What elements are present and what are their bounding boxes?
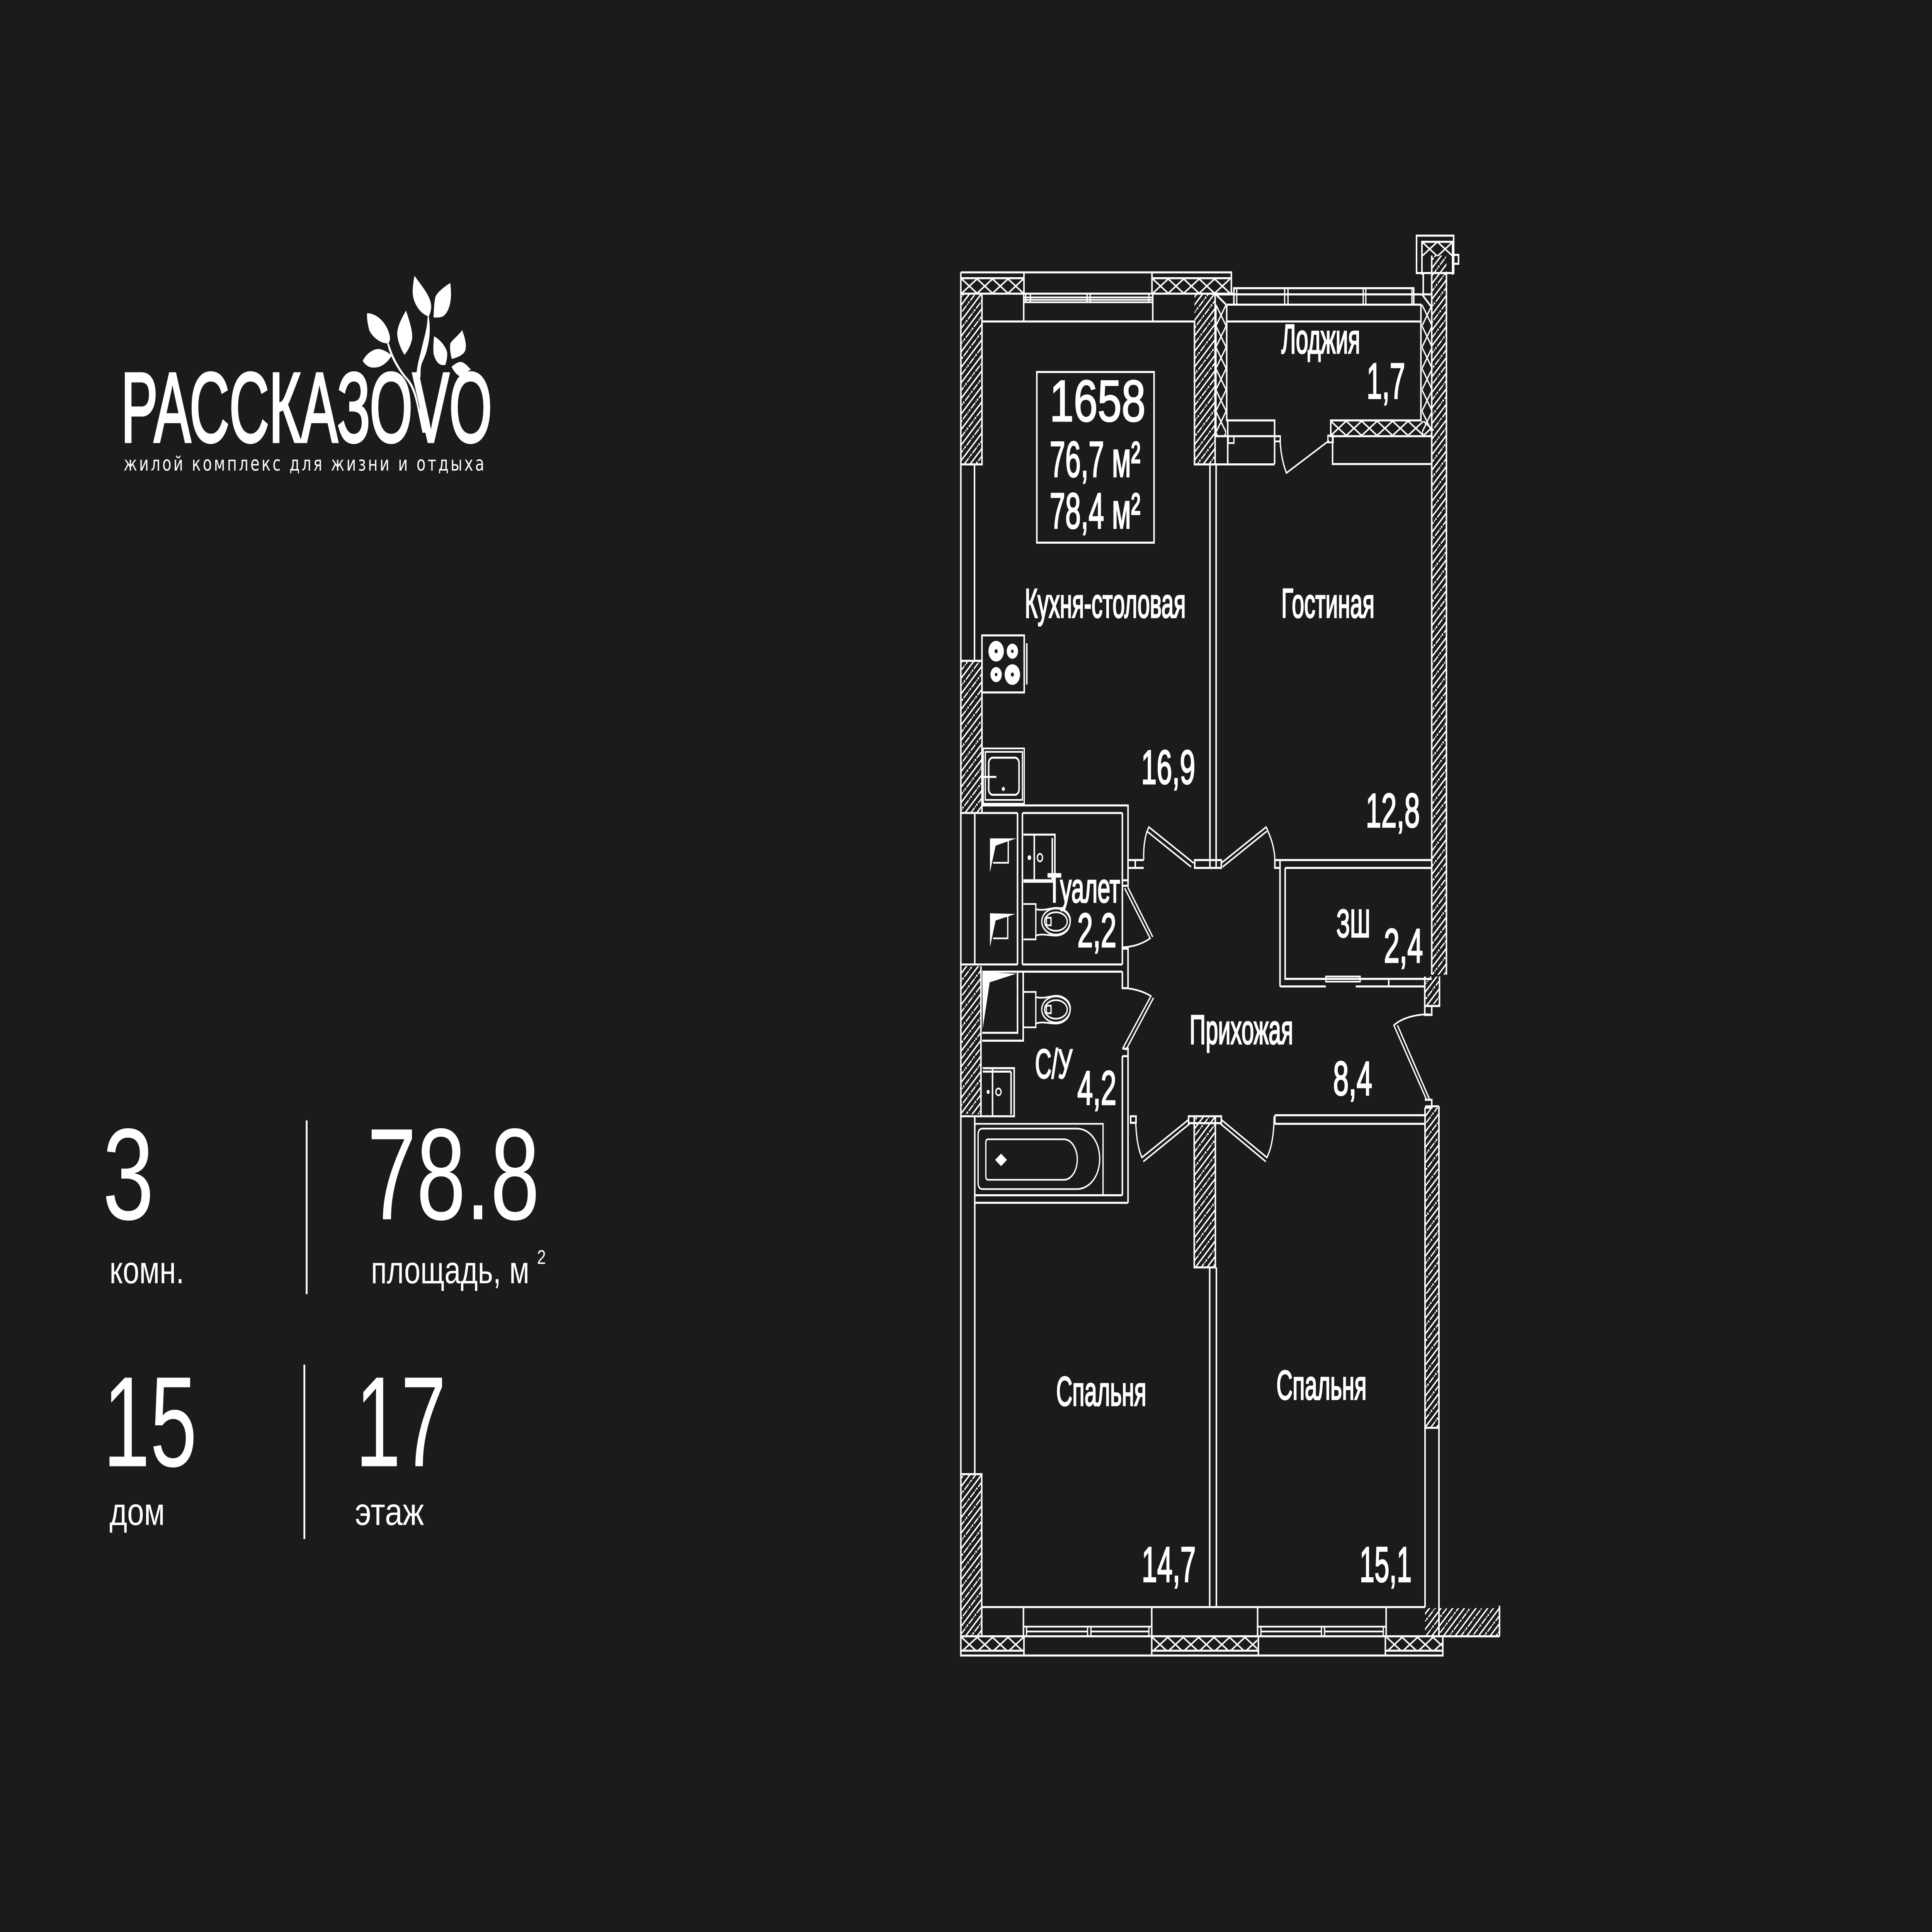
icon: bathtub	[975, 1124, 1103, 1195]
room labels: Кухня-столовая	[1025, 580, 1186, 626]
stat: area: 78.8	[367, 1102, 540, 1247]
apartment info box: 1658	[1050, 369, 1146, 434]
insulated wall bands	[962, 242, 1452, 1650]
icon: kitchen stove	[982, 635, 1027, 692]
room labels: С/У	[1035, 1041, 1073, 1087]
room labels: 2,4	[1384, 919, 1423, 973]
stat: rooms	[102, 1102, 184, 1291]
windows	[1024, 288, 1412, 1636]
logo wordmark: РАССКАЗОVО	[121, 352, 492, 463]
room labels	[1025, 316, 1423, 1593]
room labels: 12,8	[1366, 784, 1420, 838]
room labels: 4,2	[1077, 1061, 1116, 1115]
stat: floor	[355, 1350, 446, 1533]
apartment info box: 76,7 м²	[1050, 431, 1140, 488]
apartment info box: 78,4 м²	[1050, 483, 1140, 539]
icon: ventilation shafts	[982, 838, 1016, 1029]
wall outlines	[960, 236, 1500, 1655]
room labels: Гостиная	[1281, 580, 1374, 626]
room labels: 16,9	[1141, 740, 1195, 794]
stat: floor: этаж	[355, 1490, 424, 1533]
icon: bathroom washbasin	[983, 1068, 1014, 1117]
room labels: Туалет	[1048, 865, 1120, 911]
room labels: 15,1	[1360, 1537, 1412, 1593]
room labels: Прихожая	[1190, 1007, 1293, 1053]
room labels: ЗШ	[1337, 901, 1371, 946]
icon: toilet washbasin	[1024, 835, 1055, 882]
hatched load-bearing walls	[962, 255, 1500, 1635]
divider	[306, 1121, 308, 1294]
logo: Рассказово	[121, 276, 492, 475]
room labels: Спальня	[1276, 1362, 1367, 1408]
room labels: 2,2	[1077, 904, 1116, 957]
apartment info box	[1037, 369, 1154, 543]
stat: building: 15	[103, 1350, 197, 1494]
stat: building: дом	[109, 1490, 165, 1533]
stat: area: 2	[537, 1247, 546, 1268]
room labels: Лоджия	[1281, 316, 1360, 362]
icon: branch with leaves	[363, 276, 471, 433]
room labels: 8,4	[1333, 1052, 1372, 1105]
stat: area: площадь, м	[371, 1248, 529, 1291]
room labels: 1,7	[1367, 353, 1405, 409]
icon: kitchen sink	[983, 748, 1024, 804]
stat: floor: 17	[355, 1350, 446, 1494]
icon: toilet bowl 1	[1024, 904, 1070, 939]
logo tagline: жилой комплекс для жизни и отдыха	[124, 452, 484, 475]
floor plan	[960, 236, 1500, 1655]
stat: rooms: комн.	[109, 1248, 184, 1291]
divider	[303, 1365, 305, 1539]
doors	[1122, 435, 1430, 1162]
icon: toilet bowl 2	[1024, 992, 1070, 1027]
stat: rooms: 3	[102, 1102, 154, 1247]
room labels: 14,7	[1142, 1537, 1196, 1593]
room labels: Спальня	[1056, 1368, 1146, 1414]
